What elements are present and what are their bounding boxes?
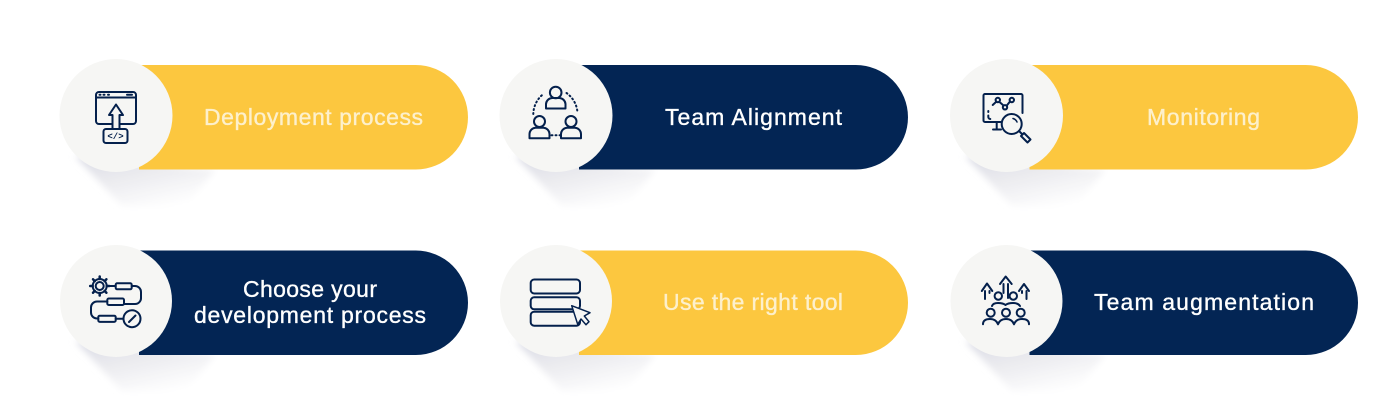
circle — [500, 59, 612, 172]
card: Team augmentation — [950, 245, 1358, 391]
card: Team Alignment — [500, 59, 908, 206]
pill — [1030, 65, 1358, 170]
icon: stacked tools with cursor — [531, 280, 590, 326]
card: Choose your development process — [60, 245, 468, 391]
label: Team augmentation — [1094, 289, 1314, 315]
circle — [60, 59, 172, 172]
pill — [139, 65, 468, 170]
label: Monitoring — [1147, 104, 1260, 130]
card: Deployment process — [60, 59, 468, 206]
shadow — [75, 341, 215, 391]
pill — [1030, 250, 1358, 355]
label: Use the right tool — [663, 289, 843, 315]
shadow — [75, 156, 215, 206]
circle — [950, 245, 1062, 357]
icon: process flow with gear and check — [90, 276, 141, 327]
label: Choose your — [243, 276, 377, 302]
pill — [579, 65, 908, 170]
label — [194, 276, 426, 328]
label: Team Alignment — [665, 104, 843, 130]
icon: deployment window with upload arrow — [96, 92, 136, 143]
circle — [60, 245, 172, 357]
shadow — [515, 156, 655, 206]
circle — [500, 245, 612, 357]
circle — [950, 59, 1063, 172]
label: Deployment process — [204, 104, 423, 130]
icon: team with rising arrows — [982, 276, 1029, 324]
card: Use the right tool — [500, 245, 908, 391]
shadow — [515, 341, 655, 391]
label: development process — [194, 302, 426, 328]
pill — [139, 250, 468, 355]
card: Monitoring — [950, 59, 1358, 206]
icon: three people in a circle — [530, 87, 581, 138]
icon: monitor with magnifier — [984, 94, 1030, 142]
shadow — [965, 156, 1105, 206]
code label: </> — [107, 132, 124, 142]
shadow — [965, 341, 1105, 391]
pill — [579, 250, 908, 355]
